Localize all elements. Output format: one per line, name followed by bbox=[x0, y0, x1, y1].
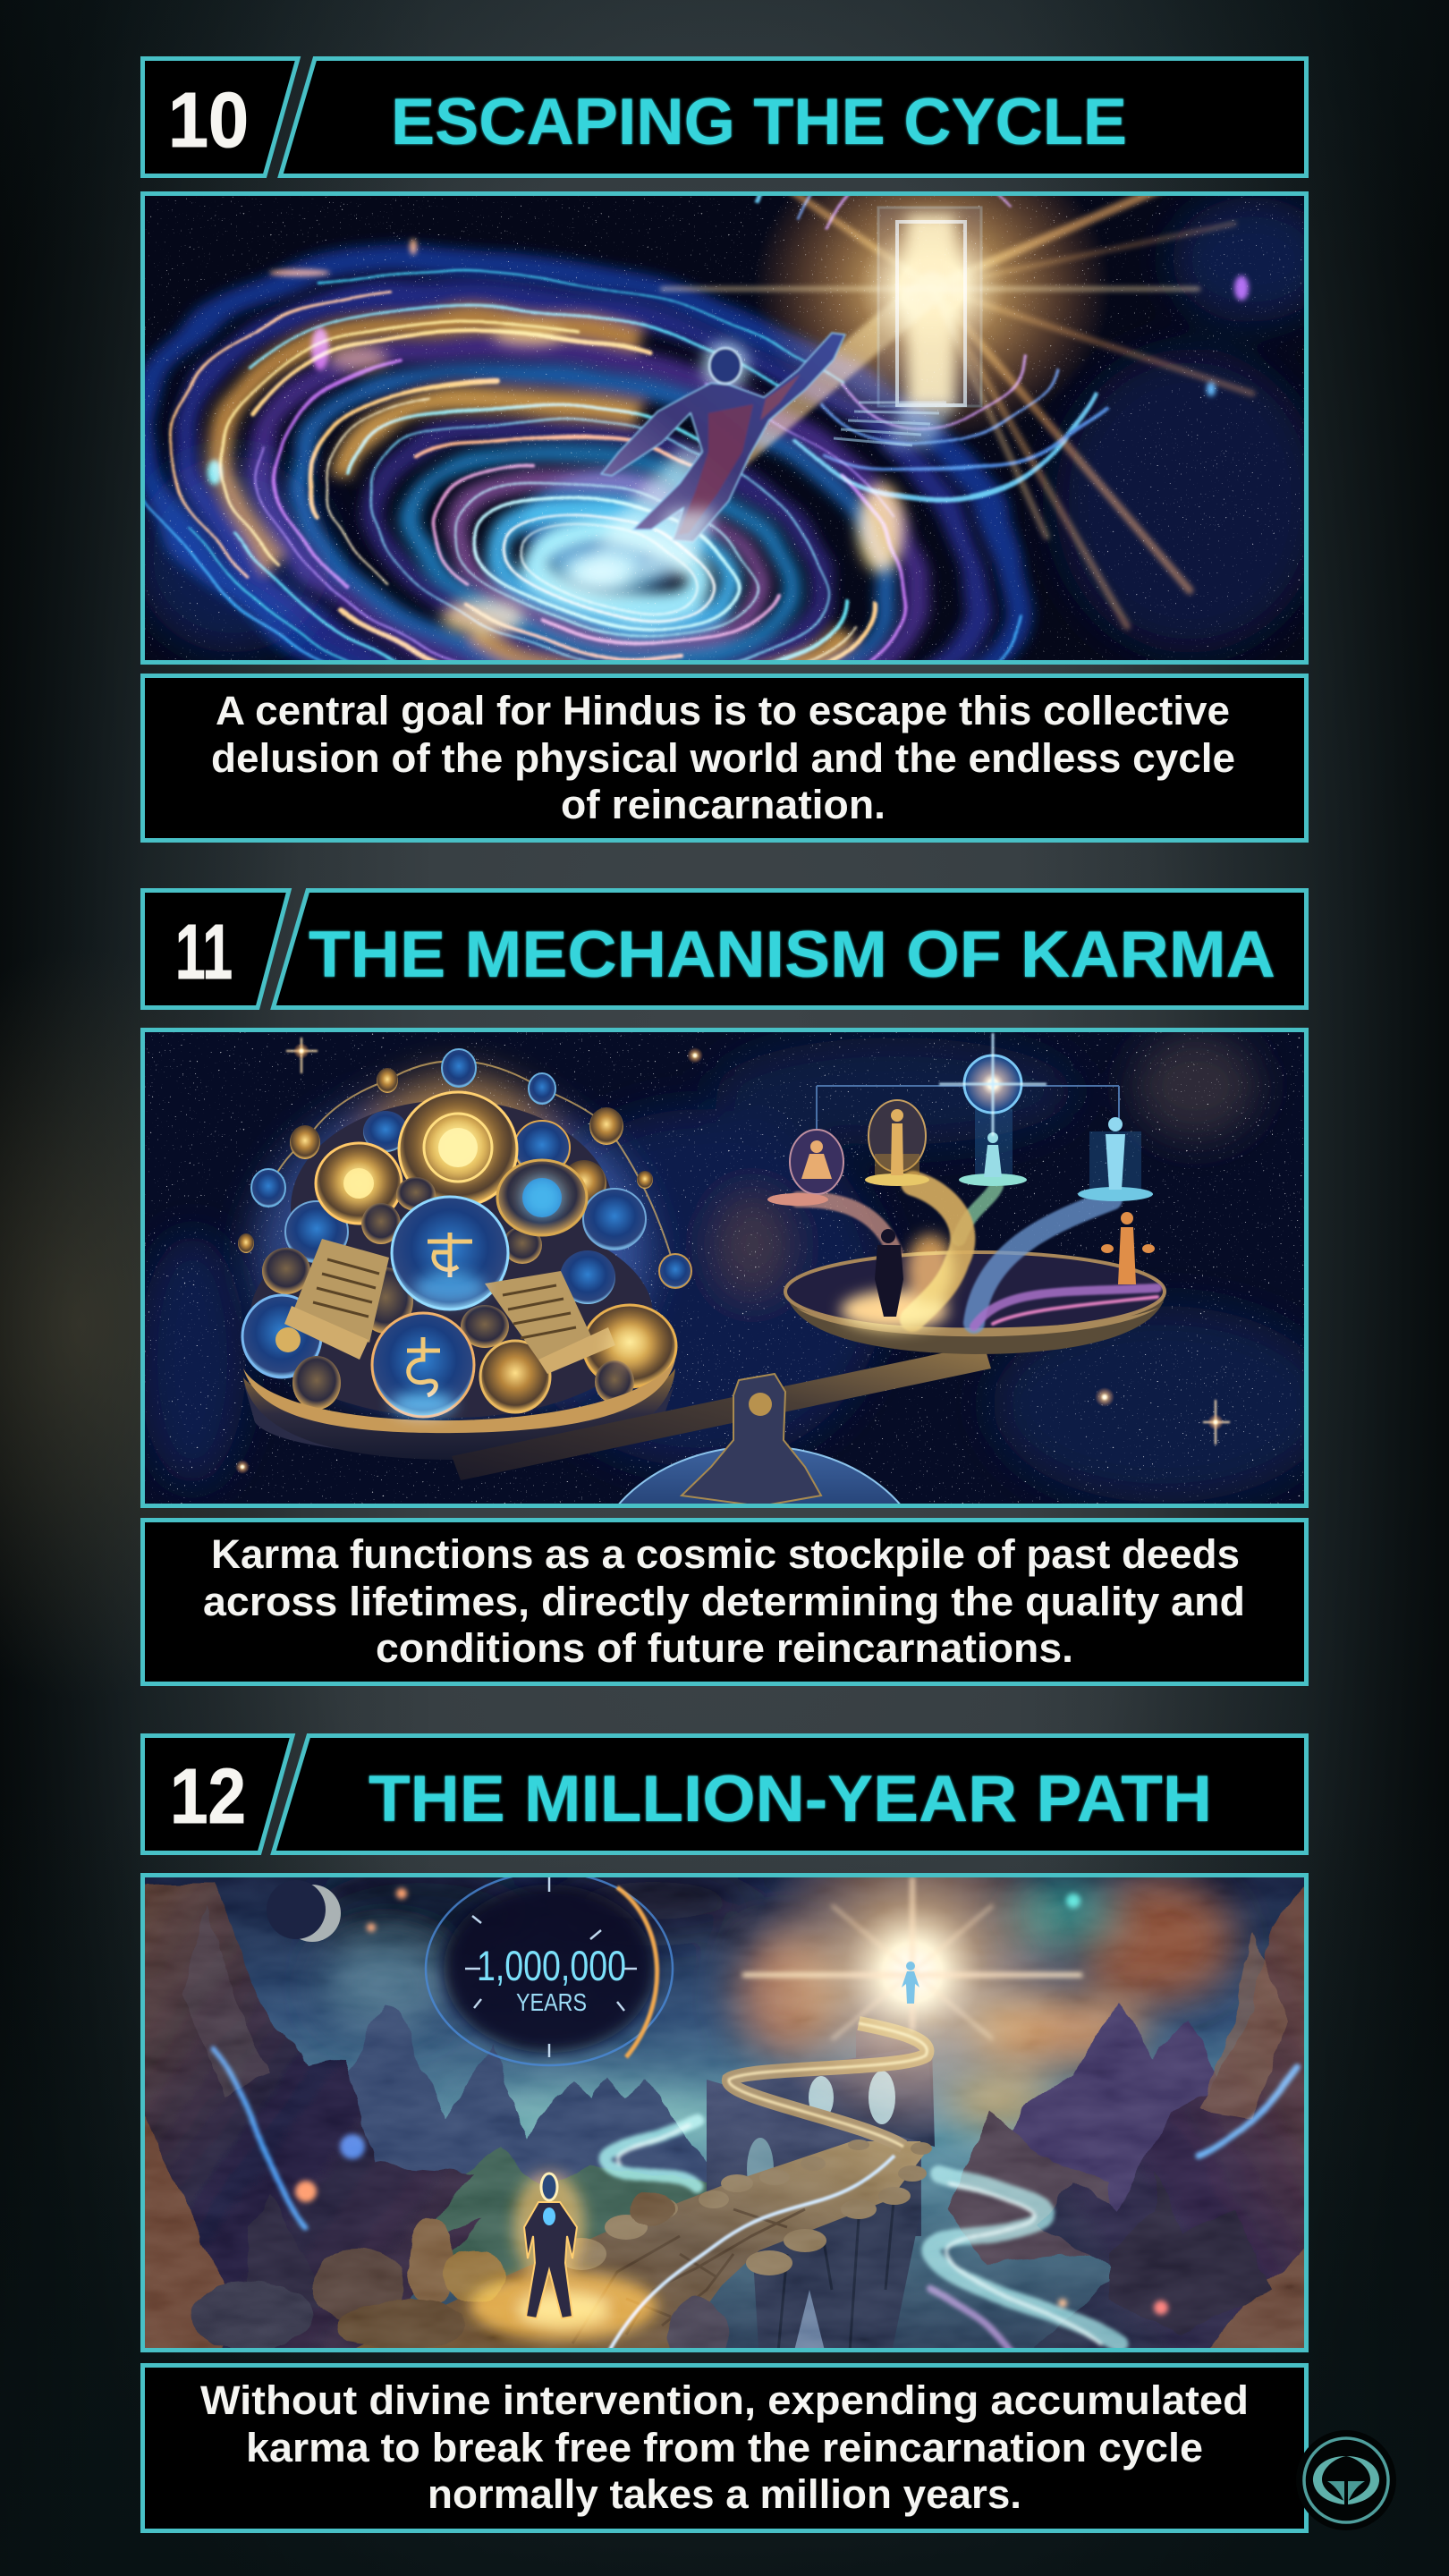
illustration: figure rising from a cosmic vortex toward a glowing portal bbox=[77, 89, 1333, 844]
caption 11: across lifetimes, directly determining the quality and bbox=[203, 1579, 1245, 1624]
valley and cliffs bbox=[142, 1883, 1315, 2361]
portal doorway and stairs bbox=[834, 208, 981, 447]
caption 10 bbox=[143, 676, 1306, 841]
caption 10: of reincarnation. bbox=[561, 782, 886, 827]
karmic ribbons bbox=[798, 1183, 1157, 1326]
left scale pan and orbs bbox=[238, 1049, 691, 1460]
heading: escaping the cycle: ESCAPING THE CYCLE bbox=[391, 86, 1127, 158]
vortex core bbox=[327, 325, 904, 635]
portal rings bbox=[753, 196, 1111, 504]
clock of a million years bbox=[426, 1872, 673, 2065]
clock of a million years: YEARS bbox=[516, 1988, 587, 2016]
section 10: escaping the cycle bbox=[77, 59, 1333, 844]
scale beam and pivot bbox=[452, 1344, 991, 1711]
illustration: stone path through mountains toward a distant light bbox=[142, 1807, 1315, 2370]
clock of a million years: 1,000,000 bbox=[477, 1942, 626, 1989]
section 12: the million-year path bbox=[142, 1735, 1315, 2531]
heading: the million-year path: THE MILLION-YEAR PATH bbox=[369, 1763, 1212, 1835]
number badge 10: 10 bbox=[168, 77, 249, 164]
caption 12: Without divine intervention, expending accumulated bbox=[200, 2377, 1249, 2423]
ribbon glow bbox=[841, 1234, 953, 1330]
caption 10: A central goal for Hindus is to escape this collective bbox=[216, 688, 1230, 733]
moon bbox=[267, 1880, 341, 1942]
scattered sparks bbox=[295, 1888, 1168, 2315]
distant light and figure bbox=[742, 1807, 1082, 2138]
number badge 12 bbox=[143, 1735, 292, 1853]
coloured sparks bbox=[208, 239, 1249, 485]
future-life figures bbox=[767, 1055, 1155, 1284]
foreground rocks bbox=[188, 2191, 728, 2370]
heading: escaping the cycle bbox=[281, 59, 1306, 175]
dark human on the pan bbox=[875, 1229, 903, 1317]
distant mountains bbox=[286, 2001, 1252, 2290]
ascending human figure bbox=[601, 333, 845, 577]
painterly texture bbox=[142, 1875, 1307, 2351]
logo badge bbox=[1296, 2430, 1396, 2530]
number badge 12: 12 bbox=[170, 1753, 246, 1840]
caption 10: delusion of the physical world and the endless cycle bbox=[211, 735, 1235, 781]
portal glow bbox=[758, 196, 1106, 438]
caption 11 bbox=[143, 1521, 1306, 1683]
portal light rays bbox=[662, 188, 1252, 626]
vortex broad colour bands bbox=[145, 236, 1040, 660]
caption 11: Karma functions as a cosmic stockpile of past deeds bbox=[211, 1531, 1240, 1577]
traveller figure bbox=[524, 2174, 577, 2318]
glowing rivers bbox=[215, 2048, 1297, 2352]
pile aura bbox=[255, 1078, 648, 1413]
celestial sparkle and stars bbox=[235, 1033, 1230, 1474]
section 11: the mechanism of karma bbox=[139, 891, 1333, 1711]
number badge 11: 11 bbox=[175, 909, 233, 996]
vortex streaks bbox=[145, 267, 1023, 660]
caption 12 bbox=[143, 2365, 1306, 2531]
right scale pan bbox=[785, 1252, 1165, 1354]
caption 12: normally takes a million years. bbox=[428, 2471, 1021, 2517]
caption 12: karma to break free from the reincarnation cycle bbox=[246, 2425, 1203, 2470]
illustration: cosmic scale weighing karma orbs against future lives bbox=[139, 1030, 1333, 1711]
bridge walls bbox=[707, 2023, 935, 2361]
orb glow bbox=[337, 1117, 653, 1417]
heading: the million-year path bbox=[274, 1735, 1306, 1853]
caption 11: conditions of future reincarnations. bbox=[376, 1625, 1073, 1671]
heading: the mechanism of karma: THE MECHANISM OF KARMA bbox=[309, 919, 1275, 991]
stone deck bbox=[354, 2023, 932, 2352]
number badge 10 bbox=[143, 59, 298, 175]
heading: the mechanism of karma bbox=[274, 891, 1306, 1007]
golden glow at feet bbox=[470, 2172, 657, 2340]
number badge 11 bbox=[143, 891, 289, 1007]
